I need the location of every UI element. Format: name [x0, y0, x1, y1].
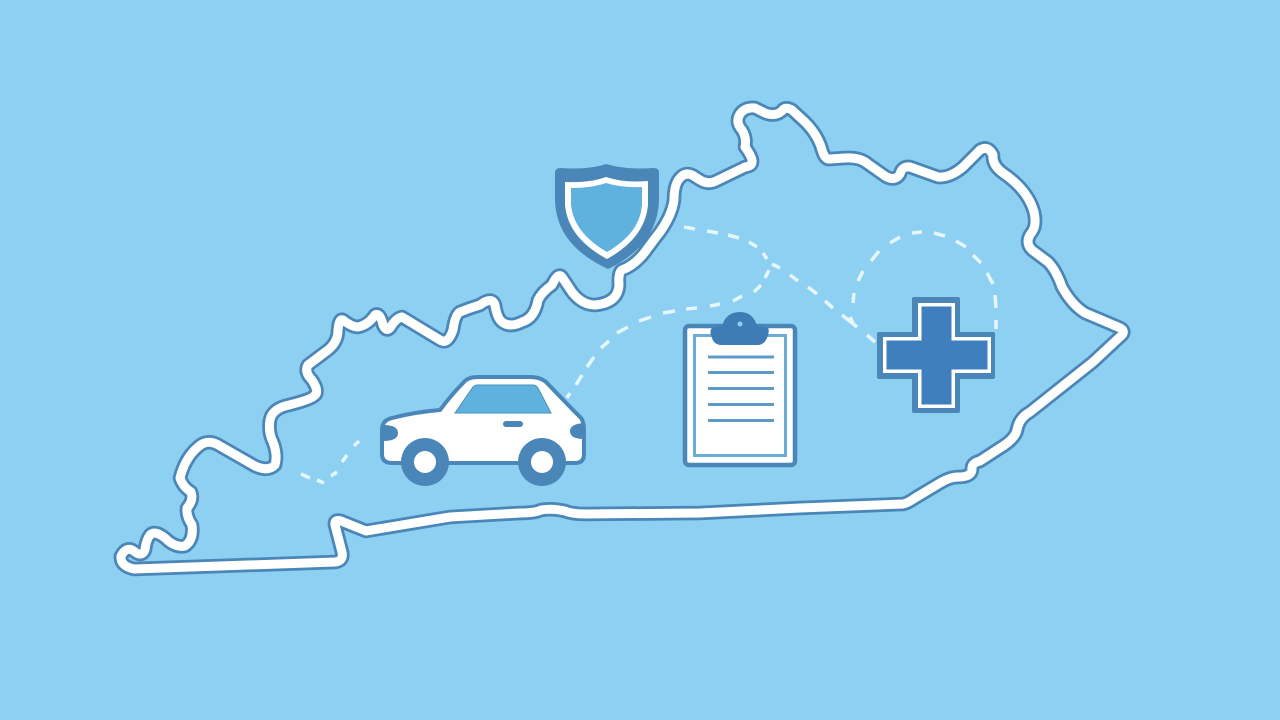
icon: clipboard — [685, 312, 795, 465]
rear wheel — [518, 438, 566, 486]
clipboard clip — [710, 312, 769, 345]
state outline of Kentucky — [121, 108, 1123, 569]
car body — [382, 377, 584, 463]
front wheel — [401, 438, 449, 486]
car window — [455, 385, 551, 413]
icon: car — [382, 377, 584, 486]
dashed route lines — [301, 227, 996, 483]
icon: medical cross — [877, 297, 995, 413]
left headlight — [383, 425, 398, 441]
right taillight — [570, 423, 584, 439]
door handle — [503, 421, 523, 427]
checklist lines — [708, 356, 774, 422]
icon: shield — [555, 164, 659, 269]
